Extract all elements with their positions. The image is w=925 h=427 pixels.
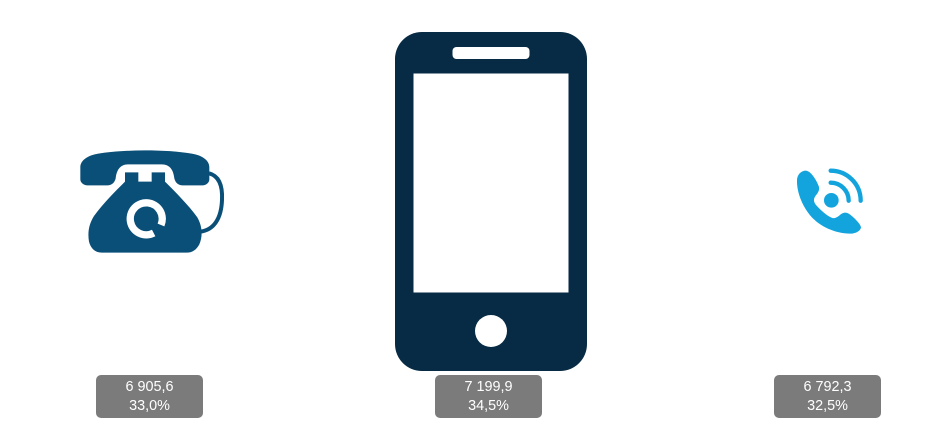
icon: smartphone bbox=[395, 32, 587, 371]
value box: mobile: 34,5% bbox=[468, 398, 509, 414]
value box: IP call: 6 792,3 bbox=[803, 378, 852, 394]
value box: IP call bbox=[774, 375, 881, 418]
value box: landline: 6 905,6 bbox=[125, 378, 174, 394]
value box: landline: 33,0% bbox=[129, 398, 170, 414]
value box: mobile: 7 199,9 bbox=[464, 378, 512, 394]
value box: mobile bbox=[435, 375, 542, 418]
value box: IP call: 32,5% bbox=[807, 398, 848, 414]
icon: call handset with signal bbox=[797, 171, 861, 234]
value box: landline bbox=[96, 375, 203, 418]
icon: landline telephone bbox=[80, 150, 222, 253]
